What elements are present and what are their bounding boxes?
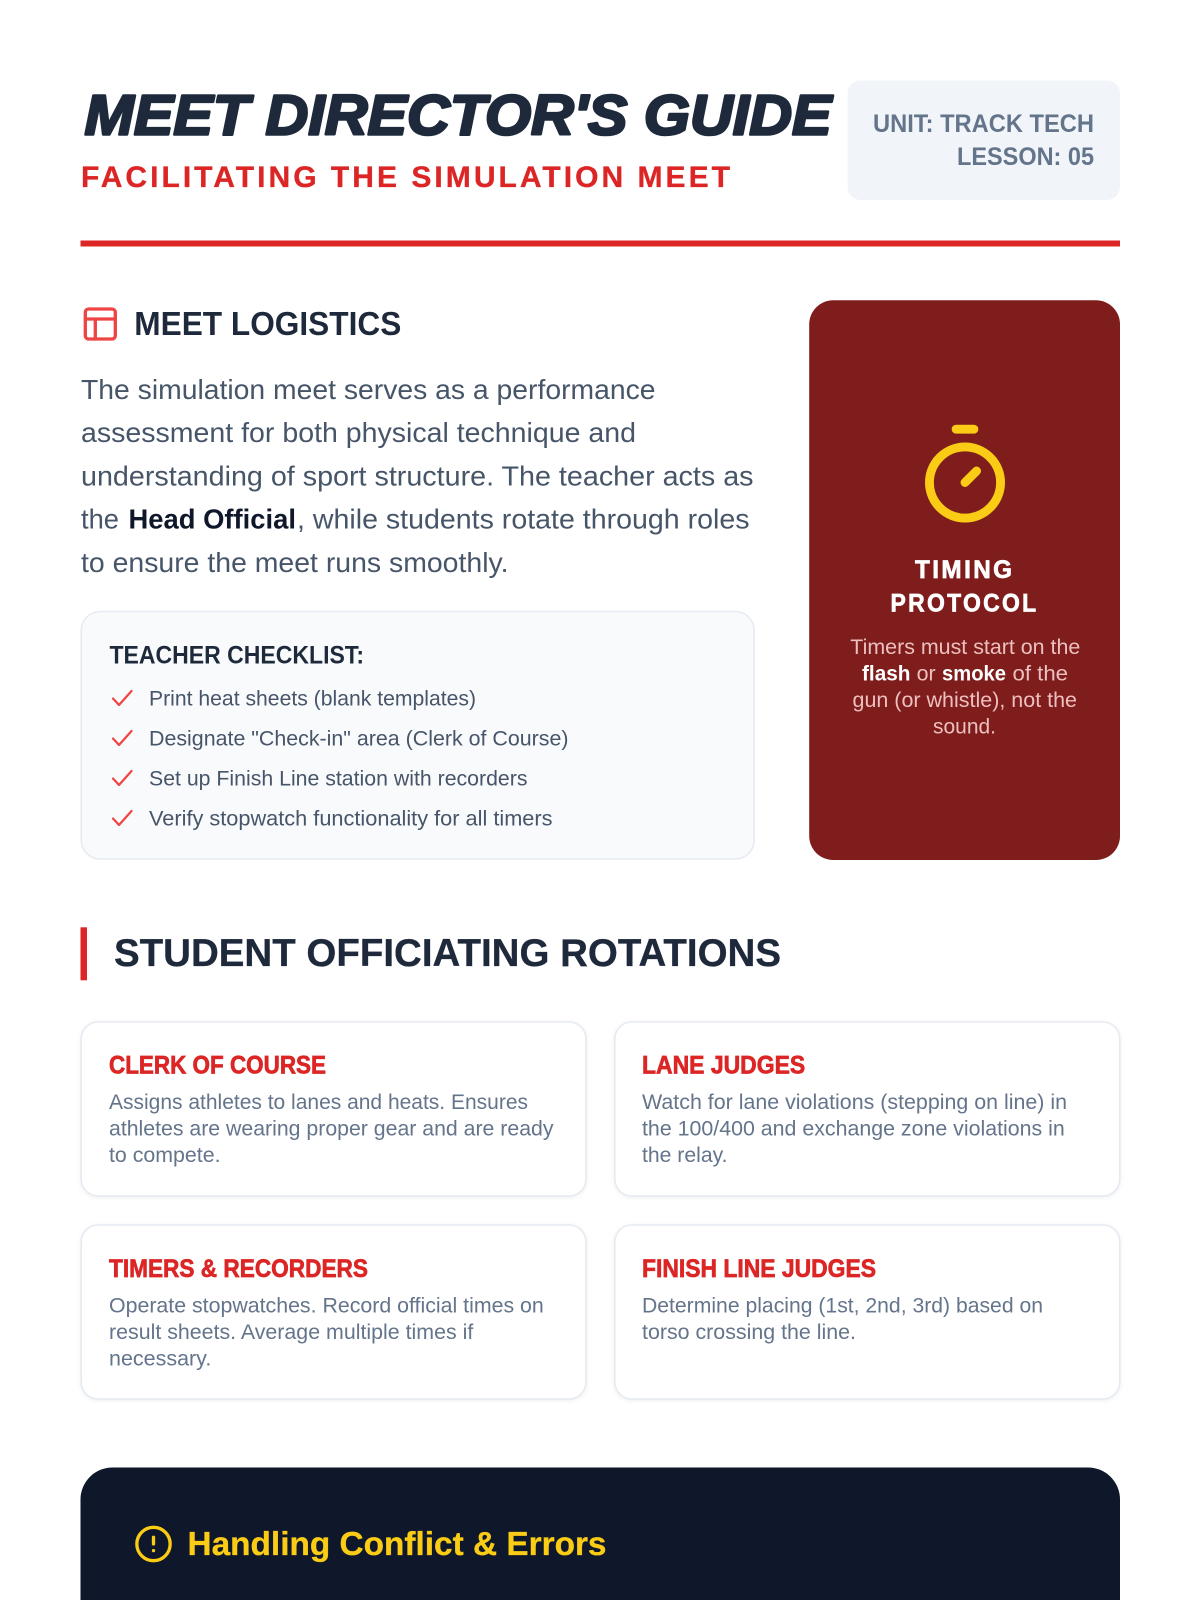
- timing protocol heading: PROTOCOL: [890, 590, 1038, 618]
- card: timers and recorders: necessary.: [109, 1348, 211, 1370]
- timing protocol text: sound.: [933, 716, 996, 739]
- card: clerk of course: athletes are wearing proper gear and are ready: [109, 1118, 554, 1141]
- intro paragraph: Head Official: [128, 504, 296, 535]
- timing protocol text: [850, 636, 1080, 739]
- card: clerk of course: CLERK OF COURSE: [109, 1052, 326, 1080]
- heading: meet logistics: MEET LOGISTICS: [134, 305, 401, 342]
- timing protocol text: Timers must start on the: [850, 636, 1080, 659]
- card: lane judges: [615, 1022, 1120, 1196]
- unit and lesson badge: [848, 80, 1120, 200]
- timing protocol text: of the: [1012, 662, 1068, 686]
- panel: handling conflict and errors: [80, 1468, 1120, 1600]
- checklist item 4: Verify stopwatch functionality for all timers: [149, 806, 552, 830]
- icon: alert circle: [137, 1527, 170, 1561]
- timing protocol text: flash: [862, 662, 910, 686]
- conflict heading: Handling Conflict & Errors: [188, 1525, 606, 1562]
- card: timers and recorders: Operate stopwatches. Record official times on: [109, 1294, 544, 1317]
- heading: student officiating rotations: STUDENT OFFICIATING ROTATIONS: [114, 932, 781, 975]
- timing protocol text: or: [917, 662, 936, 686]
- intro paragraph: The simulation meet serves as a performance: [81, 374, 656, 405]
- card: timers and recorders: [81, 1225, 586, 1399]
- subtitle: FACILITATING THE SIMULATION MEET: [81, 161, 733, 194]
- card: clerk of course: Assigns athletes to lanes and heats. Ensures: [109, 1091, 528, 1114]
- timing protocol text: gun (or whistle), not the: [852, 689, 1077, 712]
- intro paragraph: [81, 374, 754, 578]
- header: [81, 80, 1120, 200]
- intro paragraph: to ensure the meet runs smoothly.: [81, 547, 508, 578]
- timing protocol heading: TIMING: [915, 556, 1014, 584]
- card: finish line judges: FINISH LINE JUDGES: [642, 1255, 876, 1283]
- card: clerk of course: [81, 1022, 586, 1196]
- intro paragraph: understanding of sport structure. The teacher acts as: [81, 460, 754, 491]
- card: lane judges: Watch for lane violations (stepping on line) in: [642, 1091, 1067, 1114]
- icon: stopwatch: [929, 429, 1001, 518]
- intro paragraph: assessment for both physical technique and: [81, 417, 636, 448]
- card: finish line judges: Determine placing (1st, 2nd, 3rd) based on: [642, 1294, 1043, 1317]
- checklist item 2: Designate "Check-in" area (Clerk of Course): [149, 726, 568, 750]
- card: lane judges: LANE JUDGES: [642, 1052, 805, 1080]
- timing protocol heading: [890, 556, 1038, 618]
- panel: meet logistics: [81, 305, 754, 859]
- card: finish line judges: [615, 1225, 1120, 1399]
- checklist item 1: Print heat sheets (blank templates): [149, 686, 476, 710]
- panel: timing protocol: [809, 300, 1120, 860]
- checklist item 3: Set up Finish Line station with recorders: [149, 766, 528, 790]
- card: timers and recorders: TIMERS & RECORDERS: [109, 1255, 368, 1283]
- card: lane judges: the 100/400 and exchange zone violations in: [642, 1118, 1065, 1141]
- card: timers and recorders: result sheets. Average multiple times if: [109, 1321, 473, 1344]
- unit and lesson badge: LESSON: 05: [957, 143, 1094, 171]
- checklist heading: TEACHER CHECKLIST:: [110, 642, 364, 670]
- card: lane judges: the relay.: [642, 1144, 728, 1167]
- panel: teacher checklist: [81, 612, 754, 859]
- icon: layout: [85, 309, 115, 339]
- intro paragraph: the: [81, 504, 119, 535]
- unit and lesson badge: UNIT: TRACK TECH: [873, 110, 1094, 138]
- intro paragraph: , while students rotate through roles: [297, 504, 750, 535]
- timing protocol text: smoke: [942, 662, 1006, 686]
- title: MEET DIRECTOR'S GUIDE: [84, 84, 834, 148]
- card: finish line judges: torso crossing the line.: [642, 1321, 856, 1344]
- card: clerk of course: to compete.: [109, 1144, 220, 1167]
